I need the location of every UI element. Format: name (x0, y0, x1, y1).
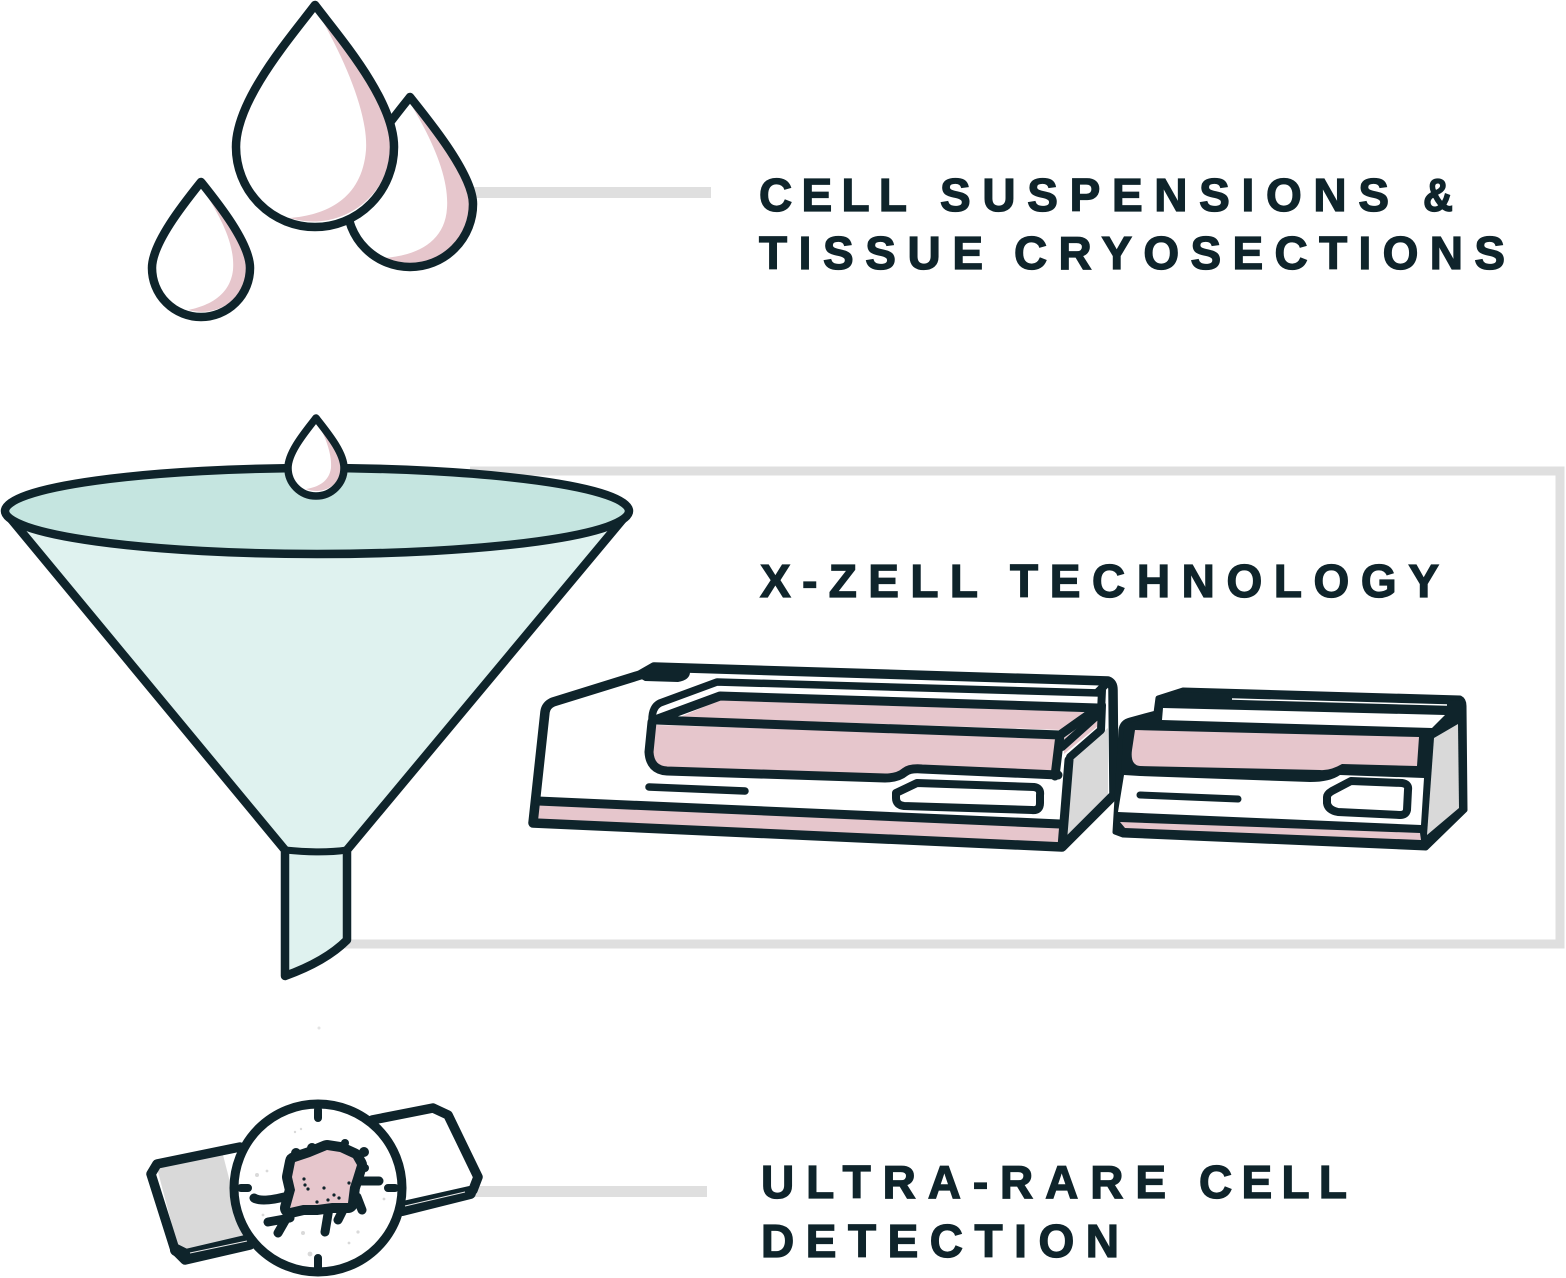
lens circle (234, 1104, 402, 1272)
cell (254, 1139, 379, 1233)
heading: ultra-rare cell detection: ULTRA-RARE (761, 1156, 1166, 1208)
heading: ultra-rare cell detection: CELL (1199, 1156, 1347, 1208)
heading: x-zell technology (760, 555, 1439, 607)
icon: funnel (5, 418, 629, 976)
icon: sample droplets (152, 5, 473, 317)
pink strip (1120, 822, 1421, 840)
heading: x-zell technology: X-ZELL (760, 555, 978, 607)
heading: ultra-rare cell detection (761, 1156, 1347, 1267)
heading: cell suspensions: CELL (759, 169, 907, 221)
heading: cell suspensions (759, 169, 1505, 279)
top white panel (1162, 708, 1445, 728)
body front (1118, 775, 1424, 825)
connector: top leader line (470, 187, 711, 198)
heading: cell suspensions: & (1423, 169, 1453, 221)
grey side (1427, 724, 1459, 835)
cell granules (302, 1177, 351, 1204)
heading: cell suspensions: SUSPENSIONS (940, 169, 1389, 221)
slide (150, 1108, 478, 1260)
connector: bottom leader line (475, 1186, 707, 1197)
heading: cell suspensions: CRYOSECTIONS (1014, 227, 1505, 279)
heading: ultra-rare cell detection: DETECTION (761, 1215, 1119, 1267)
icon: microscope slide with detected cell (150, 1104, 478, 1272)
crosshair ticks (241, 1110, 395, 1270)
background specks (255, 1128, 385, 1256)
speck (318, 1026, 320, 1030)
heading: cell suspensions: TISSUE (759, 227, 983, 279)
icon: small instrument (1115, 690, 1465, 848)
heading: x-zell technology: TECHNOLOGY (1010, 555, 1439, 607)
icon: large instrument (533, 665, 1114, 847)
icon: droplet entering funnel (288, 418, 344, 496)
connector: technology frame (345, 471, 1560, 944)
pink panel (1132, 730, 1419, 770)
